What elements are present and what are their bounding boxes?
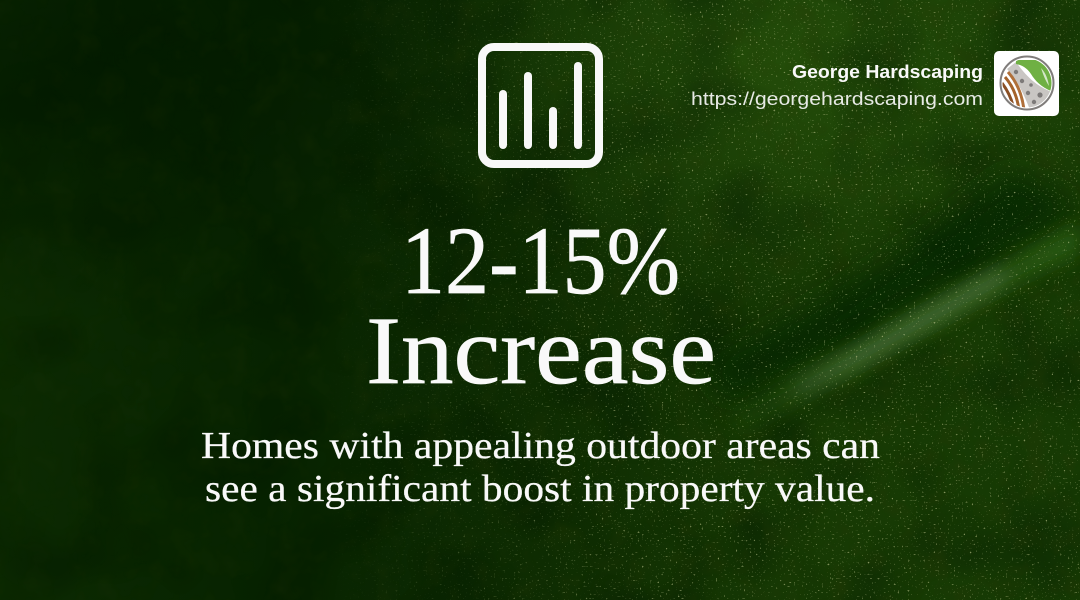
heading: 12-15% Increase: 12-15% [401,207,680,314]
heading: 12-15% Increase [366,207,716,404]
text block: description: Homes with appealing outdoor areas can [201,425,880,467]
text block: description: see a significant boost in property value. [205,468,875,510]
heading: 12-15% Increase: Increase [366,297,716,404]
text block: company name and website: George Hardscaping [792,62,983,82]
text block: description [201,425,880,510]
brown arcs [1000,72,1024,110]
icon: bar chart in rounded square [482,47,599,164]
text block: company name and website [691,62,983,109]
icon: company logo [994,51,1059,116]
stone band [1007,62,1052,110]
leaf [1016,60,1052,91]
text block: company name and website: https://georgehardscaping.com [691,89,983,109]
